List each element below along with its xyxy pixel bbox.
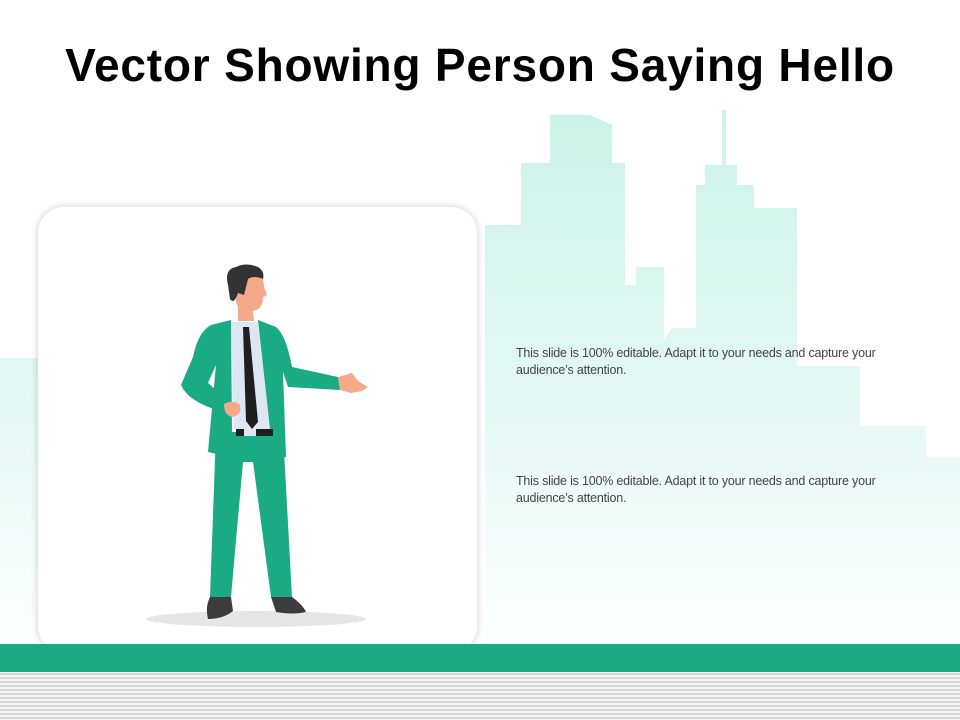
striped footer bbox=[0, 673, 960, 720]
illustration: person saying hello bbox=[146, 264, 368, 627]
title: Vector Showing Person Saying Hello bbox=[65, 39, 895, 91]
green footer bar bbox=[0, 644, 960, 672]
panel: card with person bbox=[38, 207, 477, 652]
text block 1: This slide is 100% editable. Adapt it to your needs and capture your audience’s attention. bbox=[516, 346, 876, 377]
text block 2: This slide is 100% editable. Adapt it to your needs and capture your audience’s attention. bbox=[516, 474, 876, 505]
